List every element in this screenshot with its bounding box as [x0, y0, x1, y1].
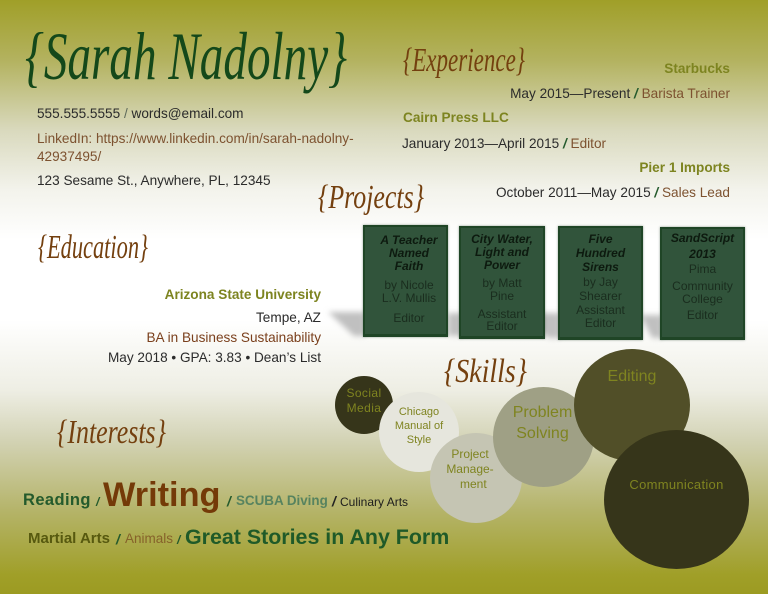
card: SandScript 2013: [660, 227, 745, 340]
card: Five Hundred Sirens: Five: [588, 232, 612, 246]
education block: [108, 287, 321, 365]
experience list: October 2011—May 2015 / Sales Lead: [496, 185, 730, 200]
experience list: Starbucks: [664, 61, 730, 76]
card: City Water, Light and Power: Light and: [475, 245, 529, 259]
card: A Teacher Named Faith: [363, 225, 448, 337]
bubble: Communication: [604, 430, 749, 569]
card: Five Hundred Sirens: Hundred: [576, 246, 625, 260]
card: A Teacher Named Faith: Named: [389, 246, 429, 260]
bubble: Social Media: Social: [346, 386, 382, 400]
bubble: Problem Solving: [493, 387, 594, 487]
interests word cloud: /: [332, 493, 336, 509]
bubble: Chicago Manual of Style: Style: [407, 434, 431, 446]
heading: Interests: {Interests}: [57, 414, 166, 451]
bubble: Project Management: Manage-: [446, 462, 494, 476]
experience list: January 2013—April 2015 / Editor: [402, 136, 606, 151]
contact details: [37, 106, 354, 188]
interests word cloud: /: [177, 533, 180, 547]
interest: Writing: Writing: [103, 476, 220, 514]
education block: Arizona State University: [165, 287, 321, 302]
interest: Reading: Reading: [23, 491, 91, 509]
card: City Water, Light and Power: by Matt: [482, 276, 522, 290]
panel: skill bubbles: [335, 349, 749, 569]
interests word cloud: /: [116, 531, 120, 547]
card: City Water, Light and Power: Power: [484, 258, 520, 272]
contact details: 555.555.5555 / words@email.com: [37, 106, 244, 121]
panel: project cards: [362, 224, 746, 342]
interests word cloud: /: [227, 493, 231, 509]
card: Five Hundred Sirens: Shearer: [579, 289, 622, 303]
bubble: Social Media: [335, 376, 393, 434]
interest: Great Stories in Any Form: Great Stories in Any Form: [185, 525, 449, 549]
title: Sarah Nadolny: {Sarah Nadolny}: [25, 18, 347, 94]
interests word cloud: /: [96, 495, 99, 509]
bubble: Chicago Manual of Style: [379, 392, 459, 472]
experience list: [402, 61, 730, 200]
education block: Tempe, AZ: [256, 310, 321, 325]
experience list: Pier 1 Imports: [639, 160, 730, 175]
bubble: Social Media: Media: [347, 401, 381, 415]
bubble: Project Management: Project: [451, 447, 489, 461]
experience list: Cairn Press LLC: [403, 110, 509, 125]
card: Five Hundred Sirens: Editor: [585, 316, 616, 330]
bubble: Problem Solving: Problem: [513, 404, 572, 421]
bubble: Project Management: ment: [460, 477, 487, 491]
card: City Water, Light and Power: Pine: [490, 289, 514, 303]
card: SandScript 2013: College: [682, 292, 723, 306]
heading: Projects: {Projects}: [318, 179, 424, 216]
education block: BA in Business Sustainability: [146, 330, 321, 345]
bubble: Communication: Communication: [629, 477, 724, 492]
card: A Teacher Named Faith: Faith: [395, 258, 423, 272]
card: SandScript 2013: 2013: [689, 247, 716, 261]
interest: Animals: Animals: [125, 531, 173, 546]
card: City Water, Light and Power: [459, 226, 545, 339]
bubble: Editing: Editing: [608, 368, 656, 385]
bubble: Problem Solving: Solving: [516, 425, 569, 442]
heading: Experience: {Experience}: [403, 42, 525, 79]
card: Five Hundred Sirens: Assistant: [576, 303, 625, 317]
bubble: Editing: [574, 349, 690, 461]
interest: SCUBA Diving: SCUBA Diving: [236, 493, 328, 508]
card: City Water, Light and Power: Assistant: [478, 307, 526, 321]
heading: Education: {Education}: [38, 229, 148, 266]
card: A Teacher Named Faith: L.V. Mullis: [382, 291, 436, 305]
card: Five Hundred Sirens: Sirens: [582, 260, 619, 274]
experience list: May 2015—Present / Barista Trainer: [510, 86, 730, 101]
contact details: 123 Sesame St., Anywhere, PL, 12345: [37, 173, 271, 188]
card: Five Hundred Sirens: by Jay: [583, 275, 618, 289]
contact details: 42937495/: [37, 149, 101, 164]
card: SandScript 2013: Community: [672, 279, 733, 293]
interest: Culinary Arts: Culinary Arts: [340, 495, 408, 509]
bubble: Project Management: [430, 433, 522, 523]
card: A Teacher Named Faith: by Nicole: [384, 278, 434, 292]
contact details: LinkedIn: https://www.linkedin.com/in/sarah-nadolny-: [37, 131, 354, 146]
education block: May 2018 • GPA: 3.83 • Dean’s List: [108, 350, 321, 365]
card: SandScript 2013: Editor: [687, 308, 718, 322]
card: SandScript 2013: SandScript: [671, 231, 734, 245]
card: A Teacher Named Faith: A Teacher: [380, 232, 438, 246]
bubble: Chicago Manual of Style: Manual of: [395, 420, 443, 432]
card: City Water, Light and Power: City Water,: [471, 232, 533, 246]
heading: Skills: {Skills}: [444, 353, 527, 390]
interest: Martial Arts: Martial Arts: [28, 530, 110, 547]
card: A Teacher Named Faith: Editor: [393, 311, 425, 325]
card: Five Hundred Sirens: [558, 226, 643, 340]
interests word cloud: [23, 476, 449, 549]
bubble: Chicago Manual of Style: Chicago: [399, 406, 439, 418]
card: SandScript 2013: Pima: [689, 262, 716, 276]
card: City Water, Light and Power: Editor: [486, 319, 518, 333]
